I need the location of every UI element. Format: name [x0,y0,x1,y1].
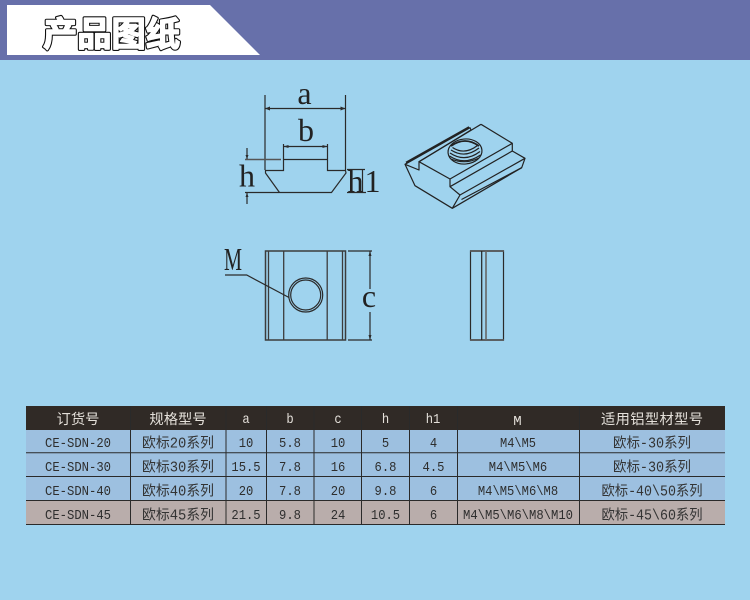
table header row: c [334,412,342,428]
table header row: h [382,412,389,428]
title tab [7,5,260,55]
table header row: 规格型号 [149,411,207,428]
dimension b [284,112,328,159]
title: 产品图纸 [43,16,180,54]
title: 产品图纸 [43,16,180,54]
row CE-SDN-30: 欧标30系列 [142,458,214,476]
row CE-SDN-20: CE-SDN-20 [45,436,111,452]
row CE-SDN-20: 5 [382,436,389,452]
row CE-SDN-45 [26,501,725,525]
row CE-SDN-30: M4\M5\M6 [489,460,547,476]
row CE-SDN-30 [26,453,725,477]
label M with leader: M [224,241,242,277]
top view of T-nut [224,241,376,340]
dimension c: c [362,278,376,314]
nut body outlines [405,124,525,208]
row CE-SDN-20: 10 [239,436,253,452]
row CE-SDN-30: 16 [331,460,345,476]
dimension b: b [298,112,314,148]
dimension c [348,251,376,340]
row CE-SDN-40: 6 [430,484,437,500]
row CE-SDN-45: 21.5 [231,508,261,524]
row CE-SDN-45: M4\M5\M6\M8\M10 [463,508,573,524]
row CE-SDN-30: 6.8 [375,460,396,476]
row CE-SDN-20: 4 [430,436,437,452]
row CE-SDN-40: 20 [331,484,345,500]
dimension a [265,75,346,170]
row CE-SDN-20: 欧标20系列 [142,434,214,452]
side view of T-nut [470,251,504,340]
table header row: h1 [426,412,440,428]
dimension h: h [239,158,255,194]
row CE-SDN-45: 9.8 [279,508,301,524]
row CE-SDN-30: 15.5 [231,460,261,476]
row CE-SDN-45: 欧标45系列 [142,506,214,524]
row CE-SDN-20: M4\M5 [500,436,536,452]
row CE-SDN-20: 5.8 [279,436,301,452]
isometric view of T-nut [405,124,525,208]
row CE-SDN-30: CE-SDN-30 [45,460,111,476]
row CE-SDN-45: 10.5 [371,508,400,524]
threaded hole [447,138,483,165]
label M with leader [224,241,289,298]
specification table [26,406,725,525]
table header row: M [513,414,522,430]
row CE-SDN-30: 4.5 [423,460,444,476]
row CE-SDN-40 [26,477,725,501]
row CE-SDN-45: 欧标-45\60系列 [602,506,702,524]
row CE-SDN-40: 20 [239,484,253,500]
row CE-SDN-45: 6 [430,508,437,524]
row CE-SDN-30: 7.8 [279,460,301,476]
table header row: 订货号 [57,411,99,428]
dimension h [239,148,281,204]
table header row: 适用铝型材型号 [601,411,703,428]
row CE-SDN-40: 欧标40系列 [142,482,214,500]
row CE-SDN-20: 10 [331,436,345,452]
row CE-SDN-20: 欧标-30系列 [613,434,691,452]
table header row: b [286,412,294,428]
top view outline and grooves [266,251,346,340]
row CE-SDN-40: M4\M5\M6\M8 [478,484,558,500]
front view drawing with dimensions [239,75,380,204]
row CE-SDN-45: CE-SDN-45 [45,508,111,524]
row CE-SDN-30: 欧标-30系列 [613,458,691,476]
row CE-SDN-40: 欧标-40\50系列 [602,482,702,500]
row CE-SDN-40: 7.8 [279,484,301,500]
row CE-SDN-40: CE-SDN-40 [45,484,111,500]
header banner [0,0,750,60]
row CE-SDN-20 [26,430,725,453]
row CE-SDN-45: 24 [331,508,345,524]
front profile [266,160,346,192]
row CE-SDN-40: 9.8 [375,484,396,500]
table header row [26,406,725,430]
bolt hole [289,278,323,312]
table header row: a [242,412,250,428]
dimension h1: h1 [348,163,380,199]
dimension a: a [297,75,312,111]
